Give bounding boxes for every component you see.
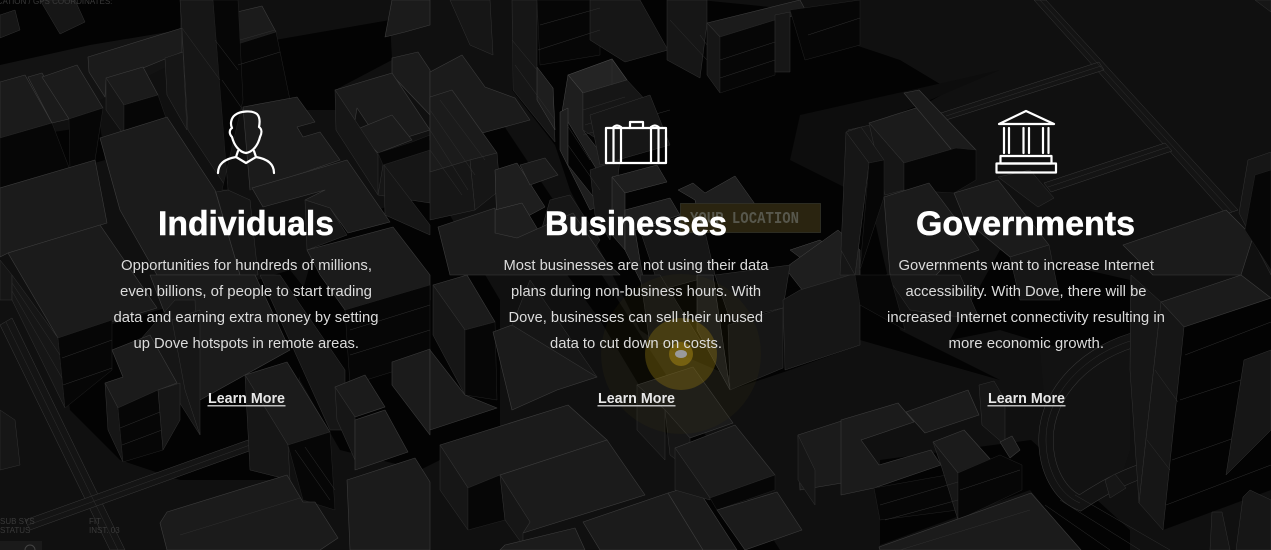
body text: Businesses: Dove, businesses can sell their unused: [508, 309, 763, 326]
link: Learn More: Learn More: [598, 390, 675, 407]
body text: Businesses: [504, 257, 769, 352]
roads: [1034, 0, 1238, 214]
centre lower buildings: [697, 275, 730, 390]
right tall blocks: [1123, 210, 1253, 275]
faint map labels: FIT: [89, 517, 101, 526]
faint map labels: [0, 0, 120, 550]
icon: person: [218, 111, 274, 173]
your location label: YOUR LOCATION: [690, 210, 799, 229]
link: Learn More: Learn More: [988, 390, 1065, 407]
heading: Individuals: Individuals: [158, 205, 334, 243]
body text: Businesses: plans during non-business hours. With: [511, 283, 761, 300]
body text: Governments: increased Internet connectivity resulting in: [887, 309, 1165, 326]
mid left blocks: [243, 97, 340, 190]
body text: Individuals: up Dove hotspots in remote areas.: [134, 335, 359, 352]
icon: government building: [996, 111, 1056, 172]
faint map labels: INST. 03: [89, 526, 120, 535]
body text: Governments: [887, 257, 1165, 352]
column: Individuals: [114, 111, 378, 407]
location marker: [601, 274, 761, 434]
heading: Businesses: Businesses: [545, 205, 727, 243]
column: Governments: [887, 111, 1165, 407]
body text: Businesses: Most businesses are not using their data: [504, 257, 769, 274]
body text: Individuals: even billions, of people to start trading: [120, 283, 372, 300]
top-left blocks: [0, 10, 20, 38]
body text: Individuals: data and earning extra money by setting: [114, 309, 378, 326]
icon: briefcase: [606, 122, 666, 163]
top centre towers: [430, 55, 530, 140]
body text: Governments: more economic growth.: [948, 335, 1104, 352]
body text: Governments: accessibility. With Dove, there will be: [906, 283, 1146, 300]
column: Businesses: [504, 122, 769, 407]
lower left blocks: [105, 335, 177, 408]
faint map labels: STATUS: [0, 526, 30, 535]
right cluster: [798, 415, 860, 490]
top centre right blocks: [667, 0, 707, 78]
centre buildings: [495, 163, 545, 227]
faint map labels: SUB SYS: [0, 517, 35, 526]
body text: Governments: Governments want to increase Internet: [898, 257, 1155, 274]
left main blocks: [0, 160, 107, 257]
body text: Individuals: [114, 257, 378, 352]
your location label: [680, 204, 820, 232]
body text: Businesses: data to cut down on costs.: [550, 335, 722, 352]
body text: Individuals: Opportunities for hundreds of millions,: [121, 257, 372, 274]
link: Learn More: Learn More: [208, 390, 285, 407]
heading: Governments: Governments: [916, 205, 1135, 243]
